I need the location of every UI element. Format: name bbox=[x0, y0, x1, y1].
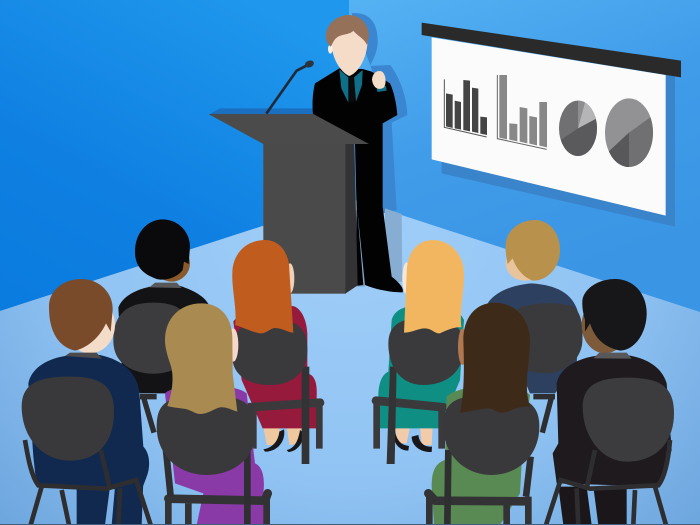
pie chart: small bbox=[559, 100, 597, 156]
chair back bbox=[232, 319, 307, 385]
collar bbox=[593, 353, 632, 359]
torso bbox=[28, 355, 149, 490]
ear bbox=[228, 328, 238, 362]
podium side bbox=[345, 143, 358, 294]
pie chart: large bbox=[605, 98, 653, 167]
presenter shadow on floor bbox=[385, 208, 402, 283]
presenter with podium bbox=[208, 13, 407, 294]
left wall bbox=[0, 0, 349, 311]
torso bbox=[487, 283, 578, 393]
screen shadow bbox=[442, 73, 675, 227]
podium top bbox=[208, 114, 369, 144]
hair bbox=[506, 220, 560, 281]
shoes bbox=[263, 429, 304, 452]
trousers bbox=[558, 487, 627, 525]
skin bbox=[506, 246, 544, 281]
hair bbox=[404, 240, 464, 333]
skin bbox=[582, 297, 628, 353]
hair bbox=[232, 240, 293, 333]
screen roller bar bbox=[422, 23, 681, 77]
skin bbox=[153, 245, 190, 282]
projection screen bbox=[422, 23, 681, 227]
chair back bbox=[388, 317, 463, 385]
dress bbox=[165, 385, 268, 525]
presenter ear bbox=[328, 44, 333, 54]
bottom edge line bbox=[0, 524, 700, 525]
audience member: back row, red hair bbox=[232, 240, 320, 464]
chair back bbox=[157, 395, 256, 475]
microphone bbox=[266, 59, 315, 114]
audience member: front row, dark brown hair woman bbox=[428, 303, 539, 525]
right wall bbox=[349, 0, 700, 312]
chair back bbox=[443, 395, 539, 475]
podium shadow bbox=[210, 108, 313, 114]
shoes bbox=[393, 432, 432, 452]
dress bbox=[432, 386, 530, 525]
presenter cuff bbox=[377, 86, 387, 92]
torso bbox=[553, 355, 672, 487]
presenter hair bbox=[326, 15, 369, 47]
bar chart: dark bbox=[444, 79, 487, 137]
hair bbox=[165, 303, 237, 414]
chair back bbox=[517, 303, 583, 373]
chair legs bbox=[533, 397, 555, 433]
floor bbox=[0, 198, 700, 525]
legs bbox=[263, 427, 302, 445]
shirt collar bbox=[339, 69, 363, 103]
audience member: back row, blond man bbox=[487, 220, 583, 433]
skin bbox=[65, 297, 115, 353]
chair posts bbox=[166, 450, 247, 525]
legs bbox=[395, 427, 433, 445]
hair bbox=[582, 279, 647, 351]
audience member: back row, black hair bbox=[113, 219, 208, 433]
chair back bbox=[113, 303, 187, 374]
chair seat bbox=[376, 401, 443, 407]
presenter fist bbox=[372, 71, 386, 89]
audience member: front row, brown hair man bbox=[22, 279, 151, 525]
chair back legs bbox=[429, 497, 528, 525]
audience member: front row, tan hair woman bbox=[157, 303, 268, 525]
necktie bbox=[349, 77, 355, 103]
collar bbox=[149, 283, 182, 288]
dress bbox=[233, 306, 317, 428]
presenter shadow on wall bbox=[352, 13, 407, 213]
chair posts bbox=[447, 450, 531, 525]
screen surface bbox=[432, 37, 666, 216]
chair back bbox=[583, 378, 674, 462]
dress bbox=[378, 305, 464, 428]
ear bbox=[402, 262, 411, 294]
chair frame bbox=[25, 440, 151, 525]
bar chart: grey bbox=[497, 75, 547, 149]
presenter face bbox=[332, 31, 368, 76]
ear bbox=[458, 328, 467, 365]
ear bbox=[286, 263, 294, 293]
chair back leg bbox=[377, 403, 442, 449]
chair seat bbox=[248, 403, 320, 407]
trousers bbox=[77, 480, 143, 525]
podium body bbox=[263, 143, 346, 294]
chair post bbox=[302, 367, 309, 464]
audience member: back row, yellow hair bbox=[376, 240, 464, 464]
chair back leg bbox=[253, 403, 319, 449]
chair seat bbox=[168, 493, 268, 501]
chair back legs bbox=[168, 497, 267, 525]
audience member: front row, dark hair man bbox=[546, 279, 674, 525]
hair bbox=[135, 219, 190, 280]
hair bbox=[460, 303, 530, 413]
torso bbox=[118, 284, 208, 393]
chair legs bbox=[140, 397, 157, 433]
chair frame bbox=[546, 440, 670, 525]
chair post bbox=[387, 367, 397, 464]
chair seat bbox=[428, 493, 527, 501]
collar bbox=[65, 353, 102, 359]
hair bbox=[49, 279, 113, 351]
presenter suit bbox=[313, 68, 403, 292]
gap shadow between legs bbox=[355, 210, 365, 287]
chair back bbox=[22, 377, 114, 461]
